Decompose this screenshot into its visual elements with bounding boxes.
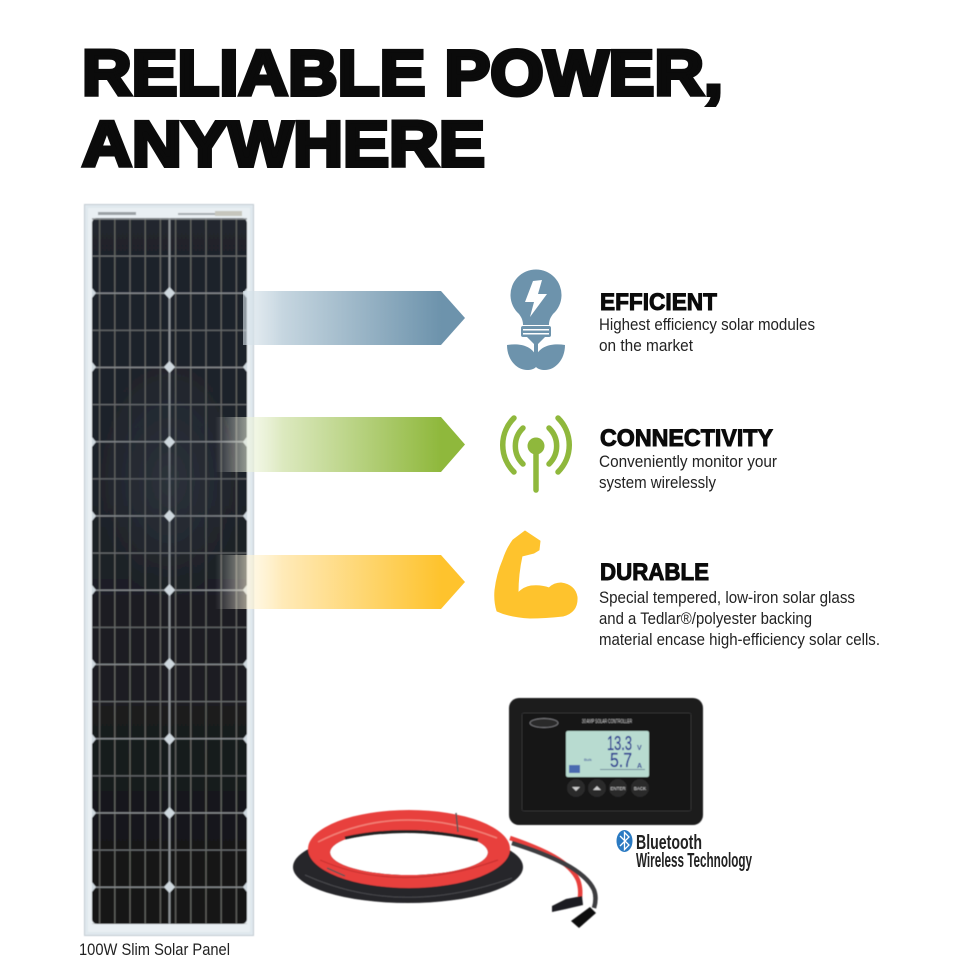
control buttons: BACK: [634, 786, 646, 791]
lcd screen: Bulk: [584, 757, 592, 762]
title: ANYWHERE: [82, 108, 485, 180]
text block: connectivity: Conveniently monitor your: [599, 452, 777, 471]
icon: light bulb with leaves: [507, 269, 565, 370]
solar panel: [84, 204, 254, 936]
arrow: connectivity: [215, 417, 465, 472]
lcd screen: 13.3: [607, 733, 632, 755]
lcd screen: 5.7: [610, 750, 632, 772]
icon: flexed arm: [495, 531, 577, 618]
text block: durable: and a Tedlar®/polyester backing: [599, 609, 812, 628]
text block: durable: Special tempered, low-iron solar glass: [599, 588, 855, 607]
text block: durable: material encase high-efficiency solar cells.: [599, 630, 880, 649]
control buttons: ENTER: [610, 786, 626, 791]
bluetooth logo: Bluetooth: [636, 832, 702, 854]
text block: efficient: Highest efficiency solar modules: [599, 315, 815, 334]
text block: efficient: EFFICIENT: [600, 289, 717, 316]
text block: connectivity: [599, 425, 777, 492]
text block: durable: DURABLE: [600, 559, 709, 586]
solar controller: [509, 698, 703, 825]
text block: efficient: [599, 289, 815, 355]
icon: wireless antenna: [503, 418, 569, 490]
control buttons: [567, 779, 649, 797]
text block: connectivity: CONNECTIVITY: [600, 425, 773, 452]
arrow: durable: [215, 555, 465, 609]
lcd screen: A: [637, 763, 642, 770]
cable coil: [293, 810, 596, 928]
solar controller: 30 AMP SOLAR CONTROLLER: [582, 719, 632, 725]
caption: 100W Slim Solar Panel: [79, 940, 230, 959]
lcd screen: V: [637, 745, 642, 752]
title: [82, 37, 723, 180]
text block: efficient: on the market: [599, 336, 693, 355]
lcd screen: [566, 731, 649, 777]
text block: connectivity: system wirelessly: [599, 473, 716, 492]
arrow: efficient: [243, 291, 465, 345]
text block: durable: [599, 559, 880, 649]
bluetooth logo: Wireless Technology: [636, 850, 753, 872]
bluetooth logo: [616, 830, 753, 872]
title: RELIABLE POWER,: [82, 37, 723, 109]
